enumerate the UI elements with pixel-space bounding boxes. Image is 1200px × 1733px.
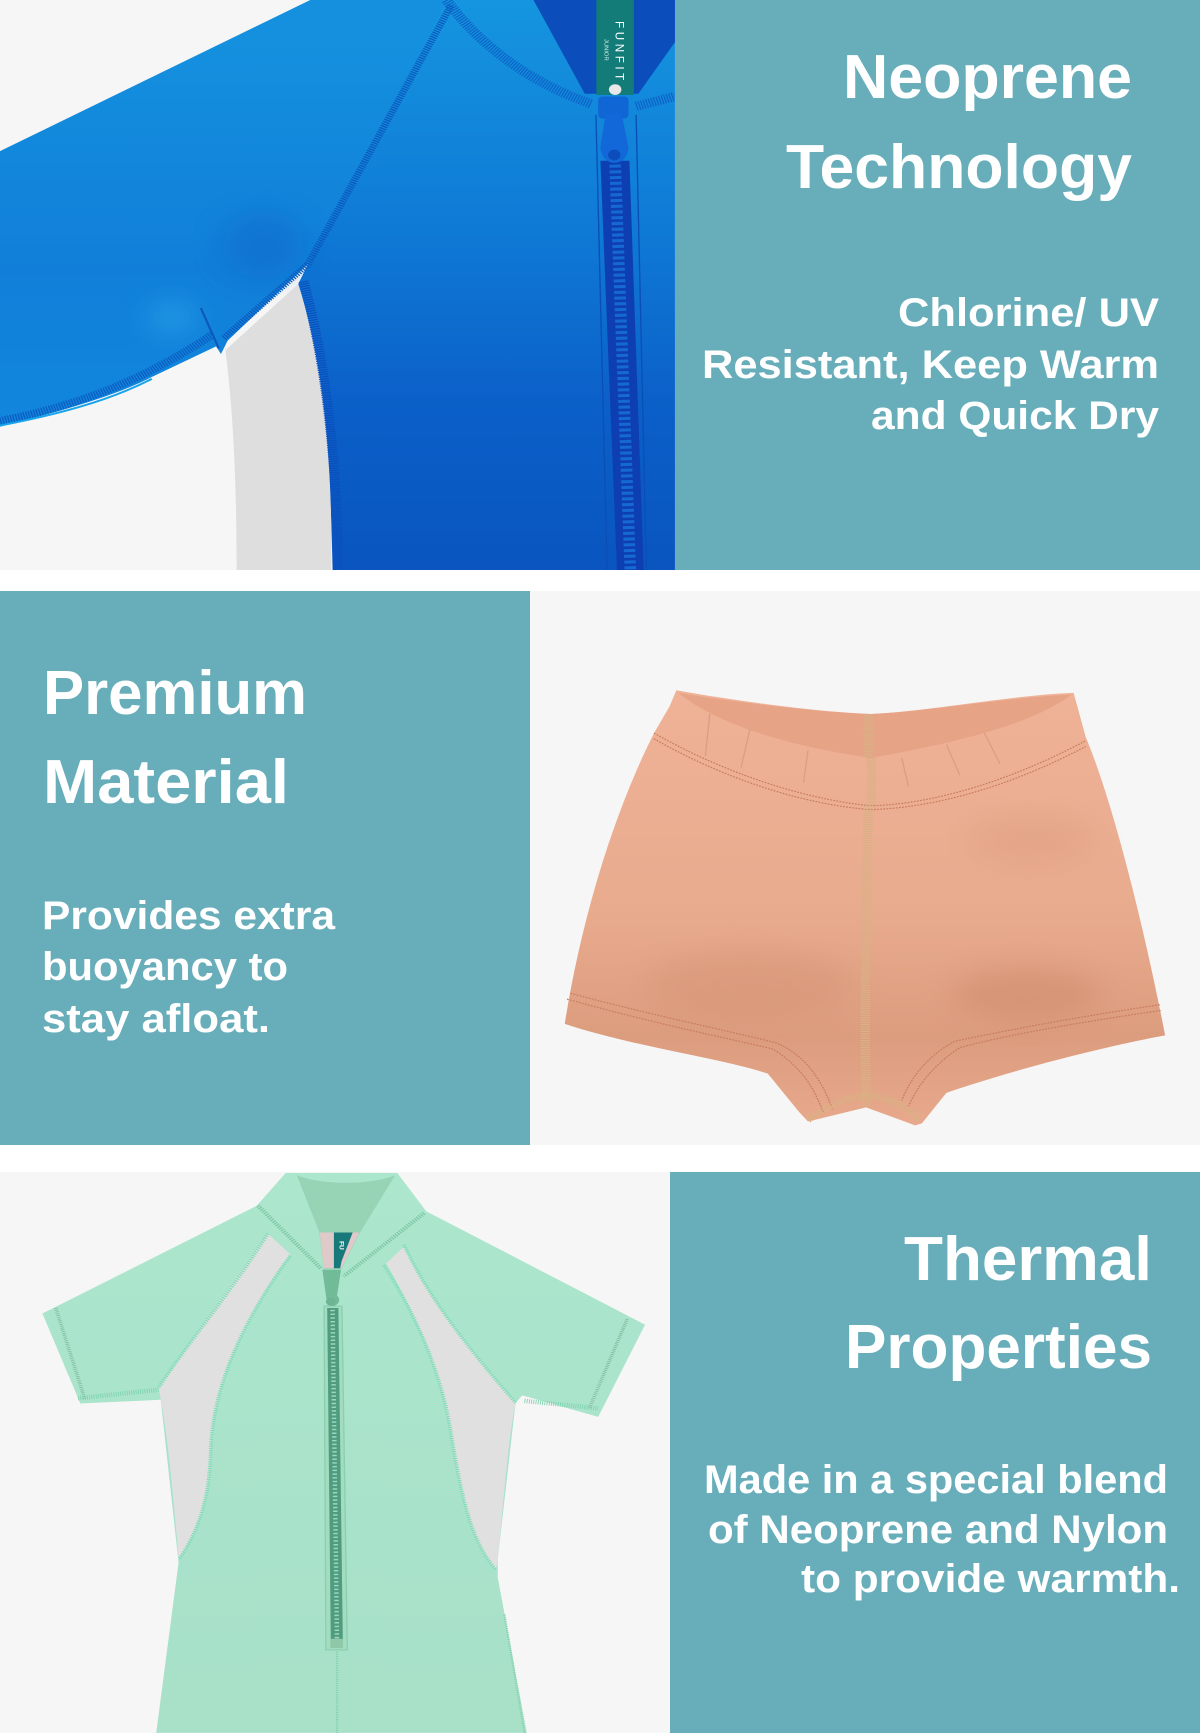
stitching [567,714,1161,1120]
description: thermal: to provide warmth. [801,1557,1180,1601]
inner waistband [679,693,1071,758]
shorts body [565,690,1165,1125]
description: thermal: of Neoprene and Nylon [708,1508,1168,1552]
neck label: FU [337,1241,344,1250]
side mesh panel [225,284,331,570]
fabric shading [694,969,805,988]
panel: neoprene technology text [675,0,1200,570]
panel: wetsuit product photo [0,1172,670,1733]
description: premium material: buoyancy to [42,945,288,989]
brand label: JUNIOR [602,39,608,61]
neck label [320,1233,359,1268]
sleeve highlight [150,300,194,335]
heading: Premium Material: Material [43,748,289,817]
description: neoprene [702,291,1160,438]
zipper [322,1270,347,1650]
heading: Thermal Properties [845,1225,1152,1382]
panel: neoprene product photo [0,0,675,570]
heading: Thermal Properties: Thermal [904,1225,1152,1294]
description: premium material [42,894,336,1041]
panel: thermal properties text [670,1172,1200,1733]
heading: Neoprene Technology [786,43,1133,202]
description: neoprene: Chlorine/ UV [898,291,1159,335]
sleeve shading [223,210,304,279]
side panel right [386,1247,516,1570]
brand label [596,0,634,95]
description: thermal [704,1458,1180,1601]
stitched seams [0,0,675,570]
panel: premium material text [0,591,530,1145]
heading: Neoprene Technology: Neoprene [843,43,1132,112]
heading: Thermal Properties: Properties [845,1313,1152,1382]
brand label: FUNFIT [613,21,626,84]
panel: shorts product photo [530,591,1200,1145]
description: premium material: Provides extra [42,894,336,938]
heading: Premium Material [43,659,307,817]
suit body [42,1173,645,1733]
jacket body [298,0,675,570]
description: neoprene: and Quick Dry [871,394,1160,438]
stitching [56,1206,627,1733]
collar interior [297,1175,395,1269]
description: thermal: Made in a special blend [704,1458,1168,1502]
side panel left [158,1234,290,1559]
jacket sleeve [0,0,451,427]
heading: Neoprene Technology: Technology [786,133,1133,202]
description: neoprene: Resistant, Keep Warm [702,343,1159,387]
heading: Premium Material: Premium [43,659,307,728]
zipper [598,96,644,570]
description: premium material: stay afloat. [42,997,270,1041]
collar opening [533,0,675,94]
